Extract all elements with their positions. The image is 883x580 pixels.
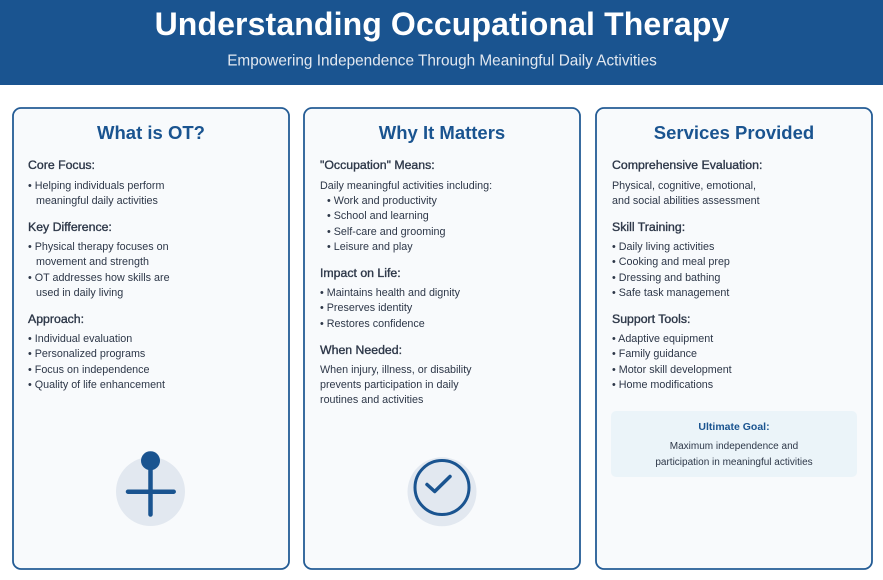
section: key difference: • Physical therapy focuses on [28, 241, 169, 253]
section: core focus: Core Focus: [28, 158, 95, 172]
section: impact on life: • Restores confidence [320, 318, 425, 330]
section: approach: Approach: [28, 312, 84, 326]
callout: ultimate goal: participation in meaningful activities [655, 457, 813, 468]
panel: What is OT? [13, 108, 289, 569]
section: key difference: used in daily living [36, 287, 123, 299]
section: skill training [612, 220, 730, 299]
section: skill training: • Dressing and bathing [612, 272, 720, 284]
section: skill training: • Cooking and meal prep [612, 256, 730, 268]
panel heading: What is OT? [97, 122, 205, 143]
section: impact on life: • Preserves identity [320, 302, 413, 314]
subtitle: Empowering Independence Through Meaningful Daily Activities [227, 52, 657, 70]
section: key difference: movement and strength [36, 256, 149, 268]
section: occupation means: • Leisure and play [327, 241, 413, 253]
section: support tools: • Adaptive equipment [612, 333, 713, 345]
section: core focus [28, 158, 164, 207]
title: Understanding Occupational Therapy [155, 6, 729, 42]
section: approach: • Individual evaluation [28, 333, 132, 345]
section: occupation means: Daily meaningful activities including: [320, 180, 492, 192]
section: skill training: • Daily living activities [612, 241, 714, 253]
section: approach: • Quality of life enhancement [28, 379, 165, 391]
section: when needed [320, 343, 472, 406]
section: key difference: Key Difference: [28, 220, 112, 234]
panel: Services Provided [596, 108, 872, 569]
section: occupation means [320, 158, 492, 253]
section: key difference [28, 220, 170, 299]
section: when needed: routines and activities [320, 394, 423, 406]
section: occupation means: • School and learning [327, 210, 429, 222]
section: when needed: When Needed: [320, 343, 402, 357]
section: support tools [612, 312, 732, 391]
section: approach: • Focus on independence [28, 364, 150, 376]
section: occupation means: • Work and productivity [327, 195, 438, 207]
section: impact on life: • Maintains health and dignity [320, 287, 461, 299]
callout: ultimate goal: Maximum independence and [670, 441, 798, 452]
header banner [0, 0, 883, 85]
icon: person cross [116, 451, 185, 526]
section: core focus: meaningful daily activities [36, 195, 158, 207]
section: comprehensive evaluation: Comprehensive Evaluation: [612, 158, 762, 172]
section: when needed: prevents participation in daily [320, 379, 459, 391]
section: support tools: • Motor skill development [612, 364, 732, 376]
section: support tools: • Family guidance [612, 348, 697, 360]
section: approach: • Personalized programs [28, 348, 145, 360]
section: key difference: • OT addresses how skills are [28, 272, 170, 284]
callout: ultimate goal: Ultimate Goal: [698, 421, 770, 433]
section: occupation means: "Occupation" Means: [320, 158, 435, 172]
section: core focus: • Helping individuals perform [28, 180, 164, 192]
icon: check mark in circle [408, 457, 476, 526]
section: skill training: • Safe task management [612, 287, 729, 299]
section: skill training: Skill Training: [612, 220, 685, 234]
section: approach [28, 312, 165, 391]
section: when needed: When injury, illness, or disability [320, 364, 472, 376]
panel heading: Why It Matters [379, 122, 505, 143]
callout: ultimate goal [611, 411, 857, 477]
section: occupation means: • Self-care and grooming [327, 226, 446, 238]
section: impact on life: Impact on Life: [320, 266, 401, 280]
section: support tools: • Home modifications [612, 379, 713, 391]
section: comprehensive evaluation: Physical, cognitive, emotional, [612, 180, 756, 192]
section: comprehensive evaluation: and social abilities assessment [612, 195, 760, 207]
section: comprehensive evaluation [612, 158, 762, 207]
panel: Why It Matters [304, 108, 580, 569]
section: support tools: Support Tools: [612, 312, 690, 326]
panel heading: Services Provided [654, 122, 814, 143]
section: impact on life [320, 266, 461, 330]
